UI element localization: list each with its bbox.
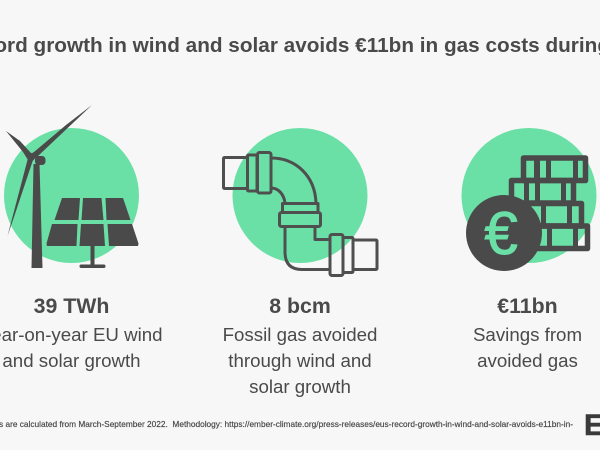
icon: coins and euro: € [484, 200, 518, 267]
stat: gas avoided [223, 294, 377, 397]
stat: gas avoided: Fossil gas avoided [223, 324, 377, 344]
solar panels [46, 198, 138, 268]
wind turbine [6, 105, 92, 268]
stat: savings: Savings from [473, 324, 582, 344]
stat: savings [473, 294, 582, 371]
euro coin [466, 195, 542, 271]
icon: gas pipe [222, 128, 378, 277]
icon: coins and euro [462, 128, 596, 271]
pipe outline [224, 152, 377, 276]
coin ridges [524, 158, 578, 249]
stat: savings: €11bn [497, 294, 558, 318]
stat: wind and solar [0, 294, 163, 371]
stat: wind and solar: and solar growth [2, 350, 141, 370]
stat: gas avoided: 8 bcm [269, 294, 331, 318]
coin stacks [512, 158, 588, 248]
icon: wind turbine and solar panels [4, 105, 139, 268]
stat: gas avoided: solar growth [249, 376, 351, 396]
green circle [462, 128, 596, 263]
stat: gas avoided: through wind and [228, 350, 372, 370]
green circle [4, 128, 139, 263]
stat: wind and solar: 39 TWh [34, 294, 109, 318]
stat: savings: avoided gas [477, 350, 578, 370]
green circle [232, 128, 368, 263]
